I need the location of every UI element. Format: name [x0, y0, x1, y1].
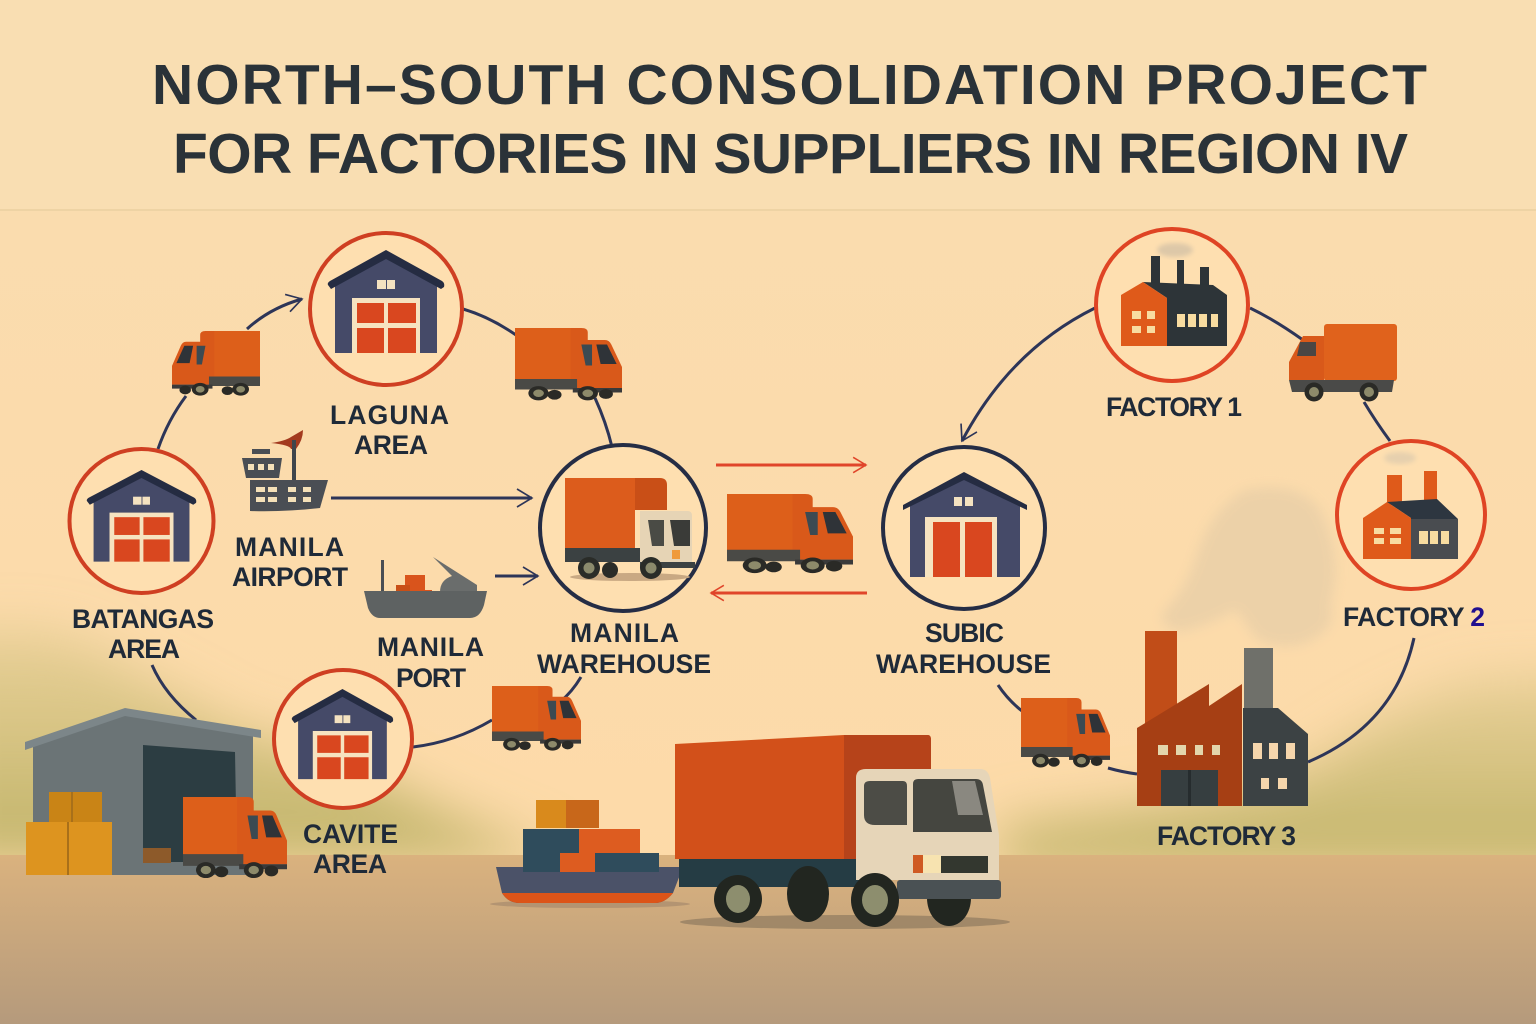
- Manila warehouse node: [540, 445, 706, 611]
- label: Manila airport: MANILA: [235, 532, 344, 562]
- label: Cavite area: [303, 819, 398, 879]
- red arrows between warehouses: [711, 465, 867, 593]
- Factory 3 building: [1137, 631, 1308, 806]
- Factory 1 node: [1096, 229, 1248, 381]
- title: NORTH–SOUTH CONSOLIDATION PROJECT: [152, 53, 1427, 117]
- label: Batangas area: BATANGAS: [72, 604, 214, 634]
- title: FOR FACTORIES IN SUPPLIERS IN REGION IV: [173, 122, 1408, 186]
- label: Subic warehouse: [876, 618, 1051, 679]
- truck: Factory 1 to Factory 2: [1289, 324, 1397, 402]
- smoke cloud: [1162, 488, 1336, 646]
- label: Laguna area: [330, 400, 449, 460]
- label: Batangas area: [72, 604, 214, 664]
- label: Cavite area: AREA: [313, 849, 387, 879]
- label: Factory 1: FACTORY 1: [1106, 392, 1242, 422]
- label: Manila airport: AIRPORT: [232, 562, 348, 592]
- label: Factory 2: FACTORY 2: [1343, 602, 1485, 632]
- label: Manila airport: [232, 532, 348, 592]
- truck: Batangas to Laguna: [172, 331, 260, 396]
- Cavite area node: [274, 670, 412, 808]
- Subic warehouse node: [883, 447, 1045, 609]
- truck: Cavite to Manila: [492, 686, 581, 751]
- large delivery truck: [675, 735, 1010, 929]
- truck: Laguna to Manila: [515, 328, 622, 400]
- grey warehouse scene: [25, 708, 261, 875]
- label: Laguna area: LAGUNA: [330, 400, 449, 430]
- label: Manila warehouse: [537, 618, 711, 679]
- connector lines: [152, 299, 1414, 774]
- label: Manila port: MANILA: [377, 632, 484, 662]
- label: Cavite area: CAVITE: [303, 819, 398, 849]
- label: Subic warehouse: WAREHOUSE: [876, 649, 1051, 679]
- icon: Manila port ship: [364, 557, 487, 618]
- label: Batangas area: AREA: [108, 634, 180, 664]
- Batangas area node: [70, 449, 214, 593]
- label: Subic warehouse: SUBIC: [925, 618, 1004, 648]
- label: Factory 3: FACTORY 3: [1157, 821, 1296, 851]
- label: Manila port: PORT: [396, 663, 466, 693]
- left hills: [0, 630, 560, 860]
- header band: [0, 0, 1536, 211]
- label: Manila warehouse: WAREHOUSE: [537, 649, 711, 679]
- label: Manila warehouse: MANILA: [570, 618, 679, 648]
- right hills: [1000, 675, 1536, 870]
- ground: [0, 855, 1536, 1024]
- icon: Manila airport ship: [242, 430, 328, 511]
- truck: between warehouses: [727, 494, 853, 573]
- title: [152, 53, 1427, 186]
- label: Manila port: [377, 632, 484, 693]
- truck: Subic to Factory 3: [1021, 698, 1110, 767]
- Laguna area node: [310, 233, 462, 385]
- label: Laguna area: AREA: [354, 430, 428, 460]
- truck: at grey warehouse: [183, 797, 287, 878]
- cargo ship with containers: [490, 800, 690, 908]
- Factory 2 node: [1337, 441, 1485, 589]
